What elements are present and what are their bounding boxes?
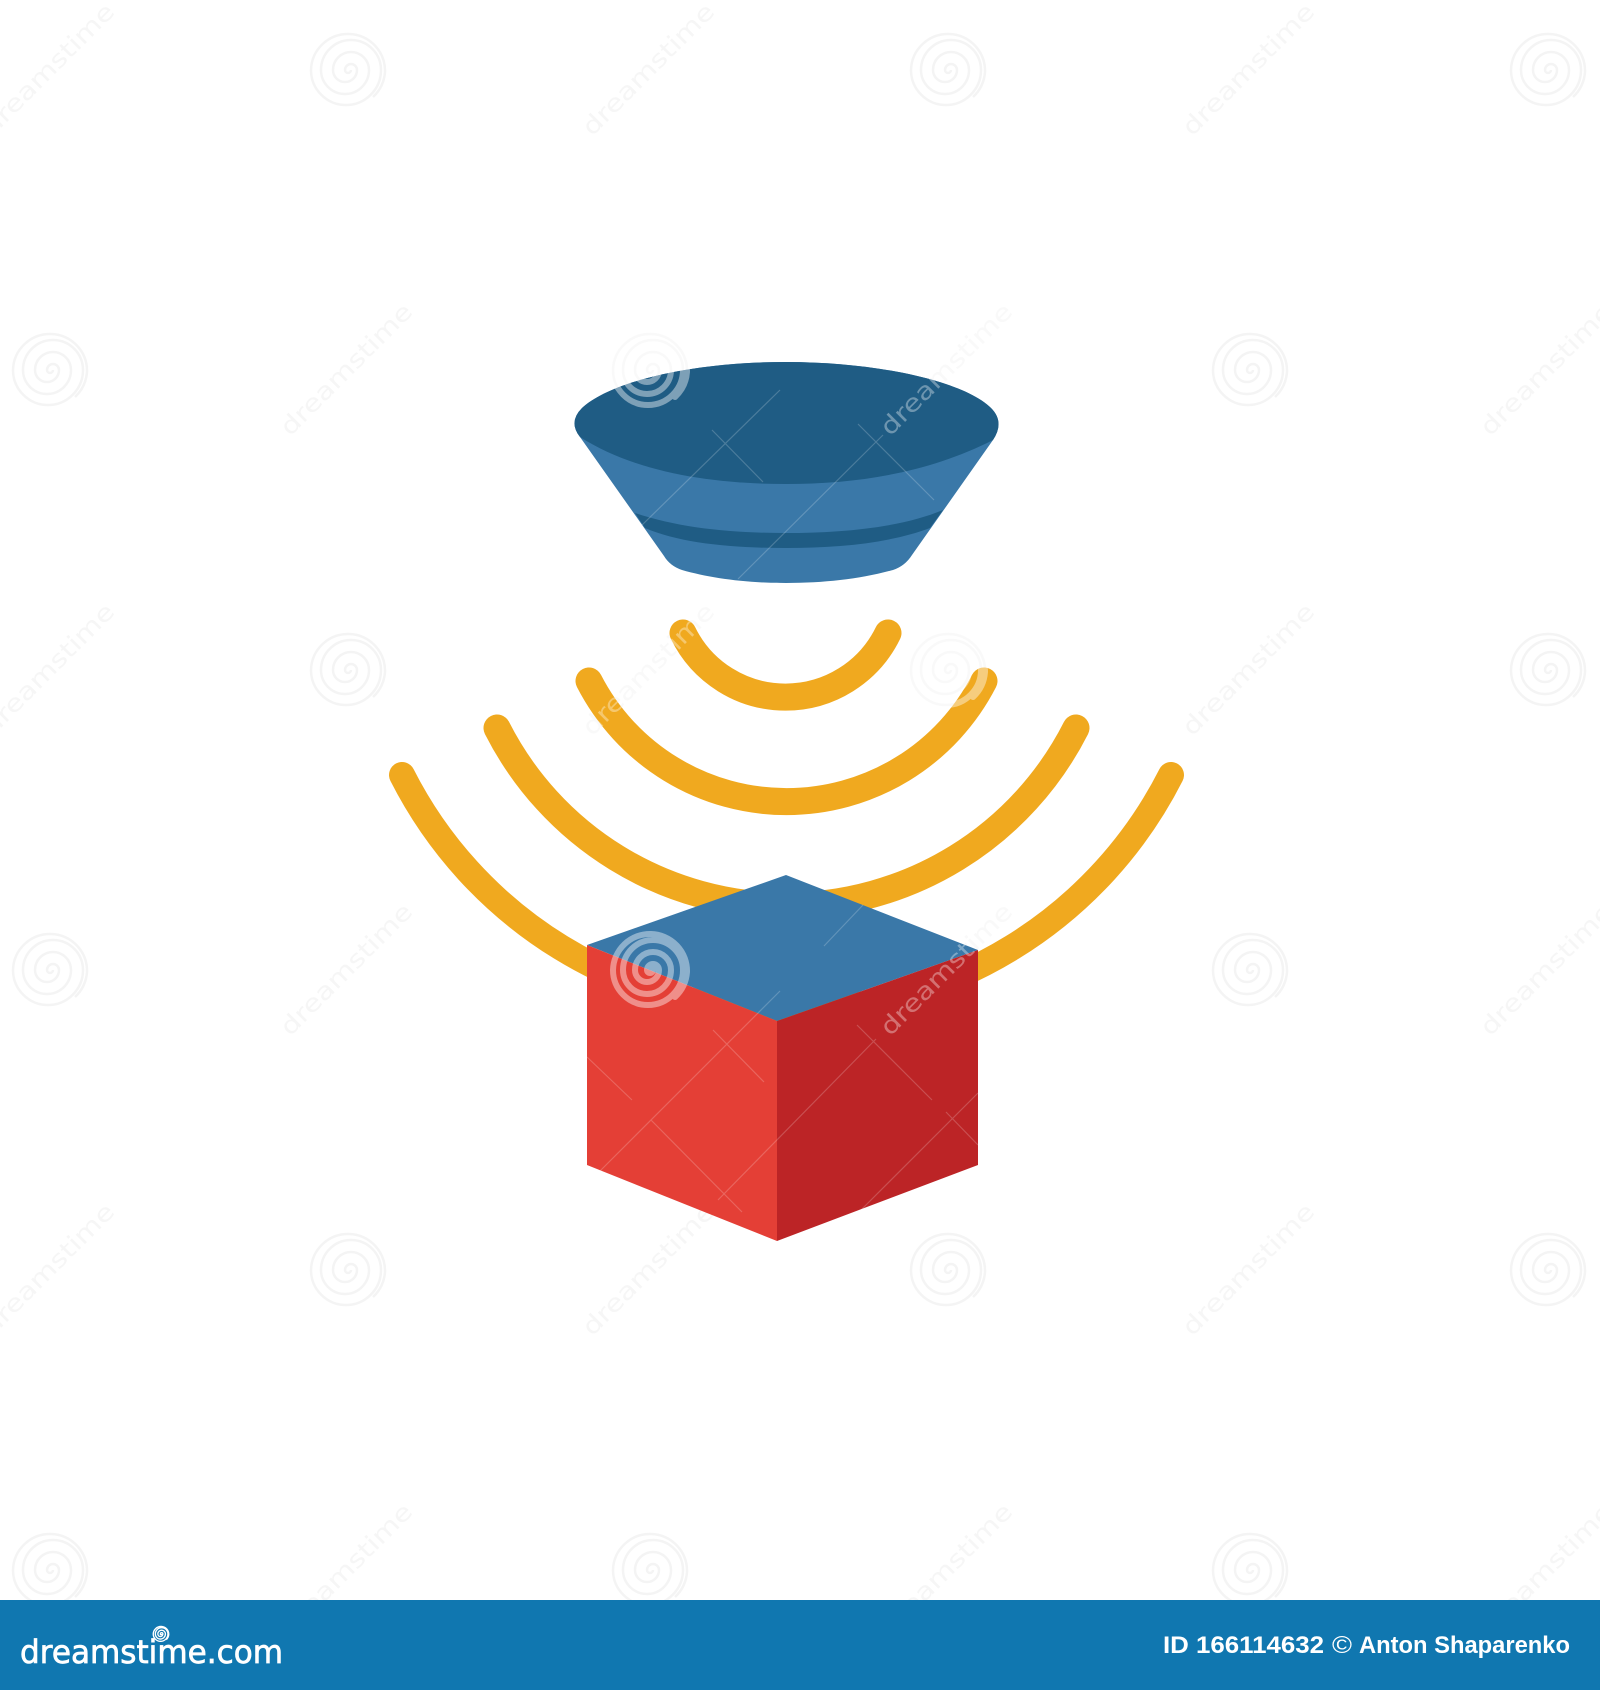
wave 3 xyxy=(497,728,1076,906)
cube left face xyxy=(587,945,777,1241)
icon: sensor bowl xyxy=(574,362,999,583)
watermark overlay on icon: dreamstime xyxy=(875,898,1018,1041)
watermark pattern: dreamstime xyxy=(275,898,418,1041)
image id and author credit: ID 166114632 xyxy=(1163,1632,1324,1659)
image id and author credit xyxy=(1163,1632,1570,1659)
watermark pattern: dreamstime xyxy=(1475,298,1600,441)
watermark pattern: dreamstime xyxy=(577,1198,720,1341)
watermark pattern: dreamstime xyxy=(577,0,720,141)
logo spiral xyxy=(153,1626,169,1641)
wave 2 xyxy=(589,681,984,802)
watermark overlay on icon: dreamstime xyxy=(875,298,1018,441)
watermark pattern: dreamstime xyxy=(1475,1498,1600,1641)
watermark pattern: dreamstime xyxy=(875,898,1018,1041)
watermark pattern: dreamstime xyxy=(275,1498,418,1641)
icon: signal waves xyxy=(402,633,1171,1011)
watermark pattern: dreamstime xyxy=(1177,1198,1320,1341)
cube right face xyxy=(777,950,978,1241)
image id and author credit: Anton Shaparenko xyxy=(1359,1632,1570,1659)
watermark pattern: dreamstime xyxy=(1475,898,1600,1041)
watermark pattern: dreamstime xyxy=(875,298,1018,441)
watermark pattern: dreamstime xyxy=(577,598,720,741)
icon: sensor with signal waves and box xyxy=(402,362,1171,1241)
watermark pattern: dreamstime xyxy=(275,298,418,441)
bowl body xyxy=(574,362,999,583)
watermark overlay on icon: dreamstime xyxy=(577,598,720,741)
wave 1 xyxy=(683,633,888,697)
logo: dreamstime.com: dreamstime.com xyxy=(20,1633,283,1671)
watermark pattern: dreamstime xyxy=(875,1498,1018,1641)
watermark pattern: dreamstime xyxy=(1177,0,1320,141)
bowl band xyxy=(635,510,943,548)
wave 4 xyxy=(402,775,1171,1011)
cube top face xyxy=(587,875,978,1021)
footer bar xyxy=(0,1600,1600,1690)
icon: cube xyxy=(587,875,978,1241)
watermark pattern: dreamstime xyxy=(1177,598,1320,741)
watermark overlay on icon xyxy=(577,298,1018,1212)
bowl top face xyxy=(574,362,999,484)
image id and author credit: © xyxy=(1332,1632,1352,1659)
